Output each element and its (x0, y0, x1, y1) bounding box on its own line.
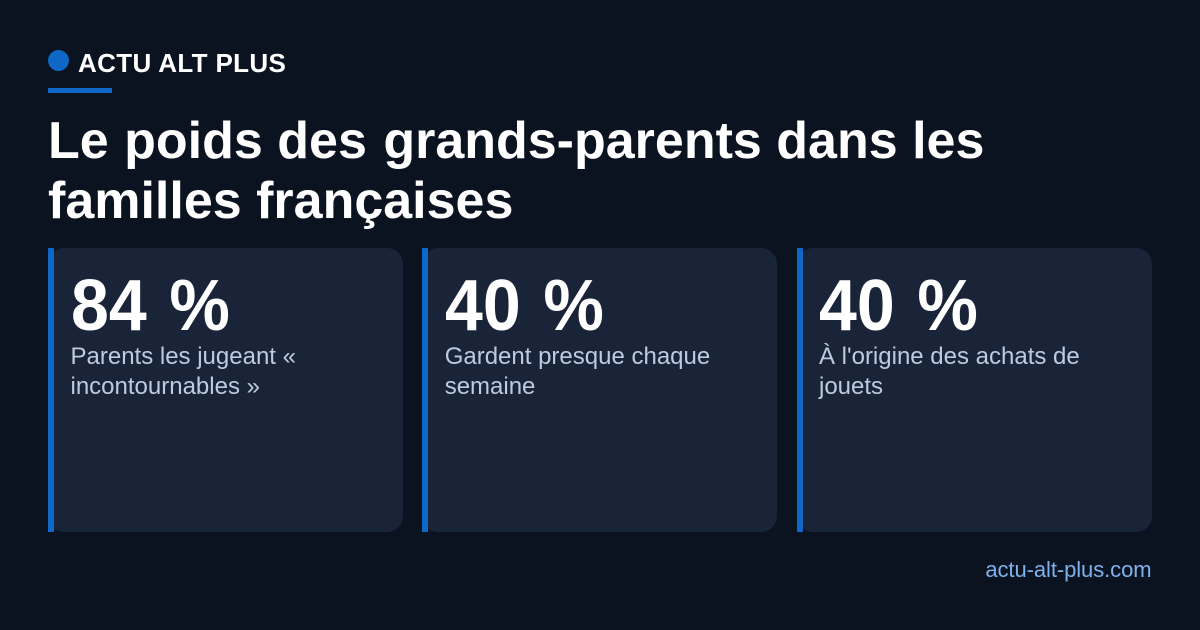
panel: stat 40 % childcare (422, 248, 777, 532)
source url: actu-alt-plus.com (985, 557, 1152, 582)
stat number: 84 % (70, 266, 229, 346)
panel accent bar (48, 248, 54, 532)
title (48, 112, 984, 230)
stat label (445, 343, 710, 400)
stat number: 40 % (819, 266, 978, 346)
panel: stat 84 % (48, 248, 403, 532)
stat number: 40 % (445, 266, 604, 346)
panel: stat 40 % toys (797, 248, 1152, 532)
stat label: jouets (819, 373, 883, 400)
stat label: incontournables » (70, 373, 260, 400)
stat label (818, 343, 1080, 400)
stat label: Parents les jugeant « (70, 343, 296, 370)
stat label: Gardent presque chaque (445, 343, 710, 370)
brand dot (48, 50, 69, 71)
brand name: ACTU ALT PLUS (78, 48, 286, 78)
title: poids (124, 112, 263, 170)
panel accent bar (797, 248, 803, 532)
stat label: semaine (445, 373, 535, 400)
title: Le des dans les (48, 112, 984, 170)
brand underline (48, 88, 112, 93)
panel accent bar (422, 248, 428, 532)
stat label (70, 343, 296, 400)
stat label: À l'origine des achats de (819, 343, 1080, 370)
title: familles françaises (48, 172, 513, 230)
title: grands-parents (383, 112, 762, 170)
